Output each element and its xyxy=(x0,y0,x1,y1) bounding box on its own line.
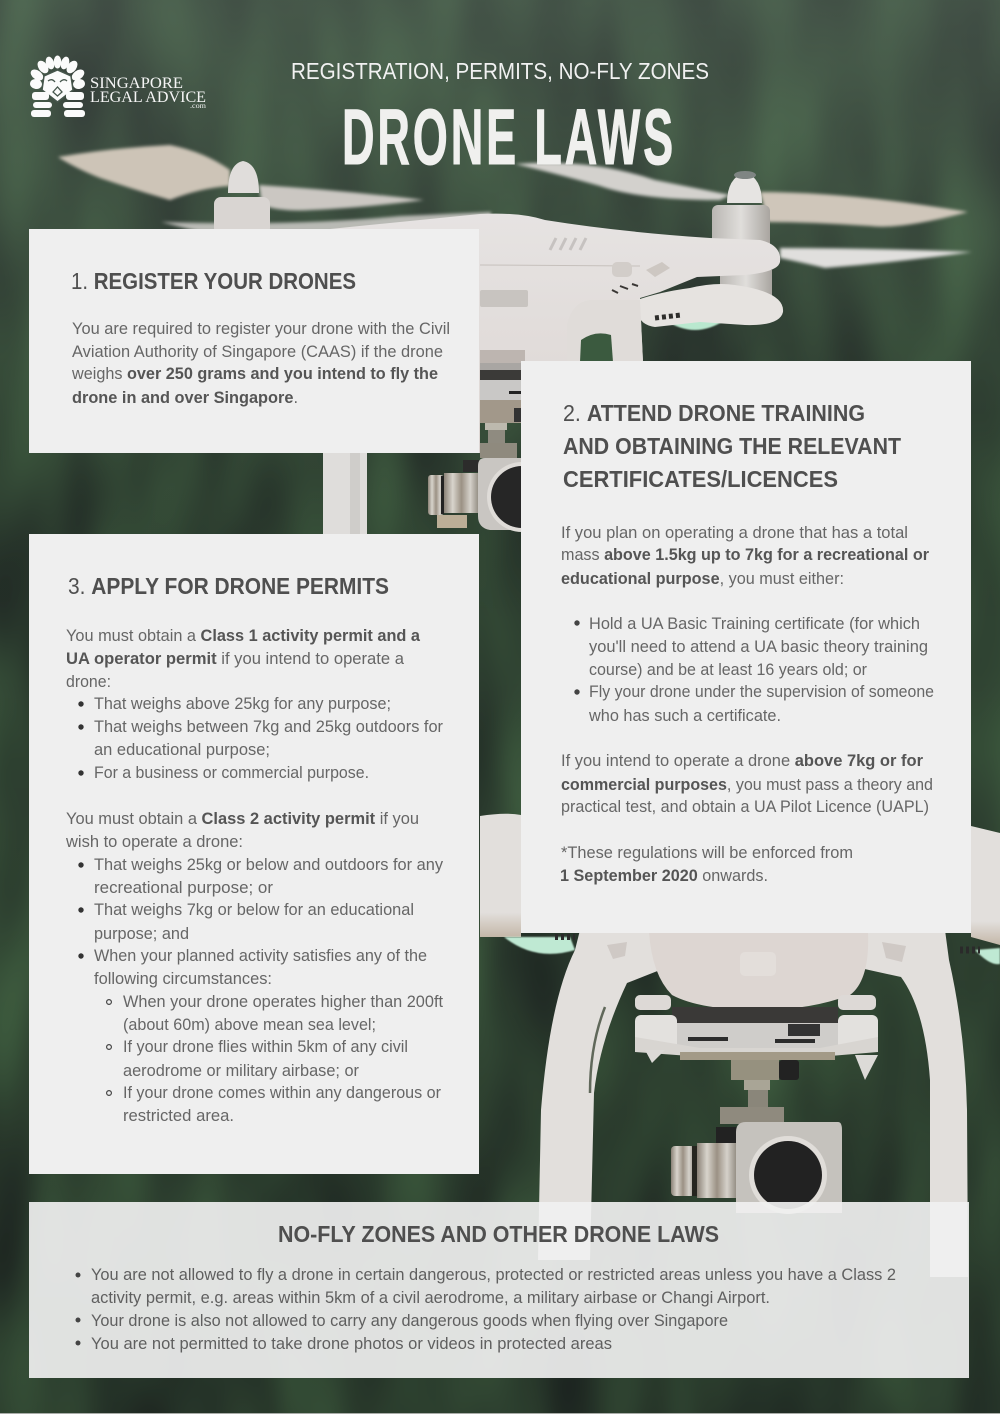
bullet list: course) and be at least 16 years old; or xyxy=(589,661,867,679)
right motor xyxy=(712,171,772,295)
heading: step 2 xyxy=(563,400,901,492)
class 1 permit text: UA operator permit if you intend to operate a xyxy=(66,650,405,668)
class 2 permit text: purpose; and xyxy=(94,925,189,943)
enforcement note xyxy=(560,844,853,885)
intro paragraph: mass above 1.5kg up to 7kg for a recreational or xyxy=(561,546,930,564)
intro paragraph: If you plan on operating a drone that has a total xyxy=(561,524,908,542)
left landing leg xyxy=(323,450,367,540)
nested circumstances list: When your drone operates higher than 200ft xyxy=(123,993,443,1011)
pilot licence paragraph: commercial purposes, you must pass a theory and xyxy=(561,776,933,794)
gimbal mount plate xyxy=(635,995,878,1080)
pilot licence paragraph: If you intend to operate a drone above 7kg or for xyxy=(561,752,924,770)
gimbal stem xyxy=(720,1080,784,1124)
pilot licence paragraph xyxy=(561,752,933,816)
logo wordmark: SINGAPORE xyxy=(90,75,183,92)
bullet list: who has such a certificate. xyxy=(588,707,781,725)
bullet list: Fly your drone under the supervision of someone xyxy=(589,683,934,701)
class 1 permit text: For a business or commercial purpose. xyxy=(94,764,369,782)
left propeller xyxy=(58,145,491,232)
class 1 permit text xyxy=(66,627,443,782)
right propeller xyxy=(515,163,972,268)
no-fly bullet list: You are not permitted to take drone photos or videos in protected areas xyxy=(91,1335,612,1353)
left drone arm xyxy=(480,814,575,954)
class 2 permit text: You must obtain a Class 2 activity permit if you xyxy=(66,810,419,828)
class 2 permit text: That weighs 25kg or below and outdoors for any xyxy=(94,856,444,874)
body text xyxy=(71,320,450,407)
class 2 permit text xyxy=(65,810,444,988)
no-fly bullet list: Your drone is also not allowed to carry any dangerous goods when flying over Singapore xyxy=(91,1312,728,1330)
enforcement note: 1 September 2020 onwards. xyxy=(560,867,768,885)
camera xyxy=(671,1122,842,1214)
nested circumstances list: If your drone flies within 5km of any civil xyxy=(123,1038,408,1056)
enforcement note: *These regulations will be enforced from xyxy=(561,844,853,862)
nested circumstances list xyxy=(107,993,443,1125)
class 1 permit text: That weighs above 25kg for any purpose; xyxy=(94,695,391,713)
bullet list: you'll need to attend a UA basic theory training xyxy=(589,638,928,656)
lower motor arm and LED xyxy=(567,284,783,362)
class 2 permit text: following circumstances: xyxy=(94,970,272,988)
class 1 permit text: an educational purpose; xyxy=(94,741,270,759)
bottom drone photo xyxy=(480,814,1000,1277)
bullet list: Hold a UA Basic Training certificate (for which xyxy=(589,615,920,633)
heading: step 3: 3. APPLY FOR DRONE PERMITS xyxy=(68,573,389,599)
heading: no-fly zones: NO-FLY ZONES AND OTHER DRONE LAWS xyxy=(278,1221,719,1247)
logo wordmark: LEGAL ADVICE xyxy=(90,89,206,106)
panel: register your drones xyxy=(29,229,479,453)
heading: step 2: 2. ATTEND DRONE TRAINING xyxy=(563,400,865,426)
logo wordmark xyxy=(90,75,207,110)
intro paragraph xyxy=(561,524,930,588)
top drone photo xyxy=(58,145,972,540)
landing legs xyxy=(538,930,968,1277)
no-fly bullet list xyxy=(76,1266,896,1353)
no-fly bullet list: You are not allowed to fly a drone in certain dangerous, protected or restricted areas unless you have a Class 2 xyxy=(91,1266,896,1284)
nested circumstances list: If your drone comes within any dangerous or xyxy=(123,1084,441,1102)
intro paragraph: educational purpose, you must either: xyxy=(561,570,844,588)
body text: drone in and over Singapore. xyxy=(72,389,298,407)
logo wordmark: .com xyxy=(190,102,207,110)
heading: step 2: CERTIFICATES/LICENCES xyxy=(563,466,838,492)
nested circumstances list: aerodrome or military airbase; or xyxy=(123,1062,359,1080)
body text: You are required to register your drone with the Civil xyxy=(72,320,450,338)
panel: apply for drone permits xyxy=(29,534,479,1174)
class 2 permit text: recreational purpose; or xyxy=(94,879,274,897)
title: DRONE LAWS xyxy=(342,92,676,181)
heading: step 2: AND OBTAINING THE RELEVANT xyxy=(563,433,901,459)
no-fly bullet list: activity permit, e.g. areas within 5km of a civil aerodrome, a military airbase or Changi Airport. xyxy=(91,1289,770,1307)
nested circumstances list: (about 60m) above mean sea level; xyxy=(123,1016,376,1034)
left motor xyxy=(214,161,270,235)
nested circumstances list: restricted area. xyxy=(123,1107,234,1125)
drone shell xyxy=(649,932,868,1010)
right drone arm xyxy=(960,826,1000,964)
subtitle: REGISTRATION, PERMITS, NO-FLY ZONES xyxy=(291,58,709,84)
class 1 permit text: drone: xyxy=(66,673,111,691)
panel: no-fly zones xyxy=(29,1202,969,1378)
body text: weighs over 250 grams and you intend to fly the xyxy=(71,365,438,383)
icon: lion mane xyxy=(29,56,86,117)
top gimbal and camera xyxy=(428,350,557,532)
panel: attend drone training xyxy=(521,361,971,933)
heading: step 1: 1. REGISTER YOUR DRONES xyxy=(71,268,356,294)
logo: singapore legal advice xyxy=(29,56,207,117)
drone body xyxy=(330,214,780,453)
class 1 permit text: That weighs between 7kg and 25kg outdoors for xyxy=(94,718,443,736)
bullet list xyxy=(574,615,934,725)
class 1 permit text: You must obtain a Class 1 activity permit and a xyxy=(66,627,421,645)
pilot licence paragraph: practical test, and obtain a UA Pilot Licence (UAPL) xyxy=(561,798,929,816)
class 2 permit text: That weighs 7kg or below for an educational xyxy=(94,901,414,919)
body text: Aviation Authority of Singapore (CAAS) if the drone xyxy=(72,343,443,361)
class 2 permit text: wish to operate a drone: xyxy=(65,833,243,851)
class 2 permit text: When your planned activity satisfies any of the xyxy=(94,947,427,965)
